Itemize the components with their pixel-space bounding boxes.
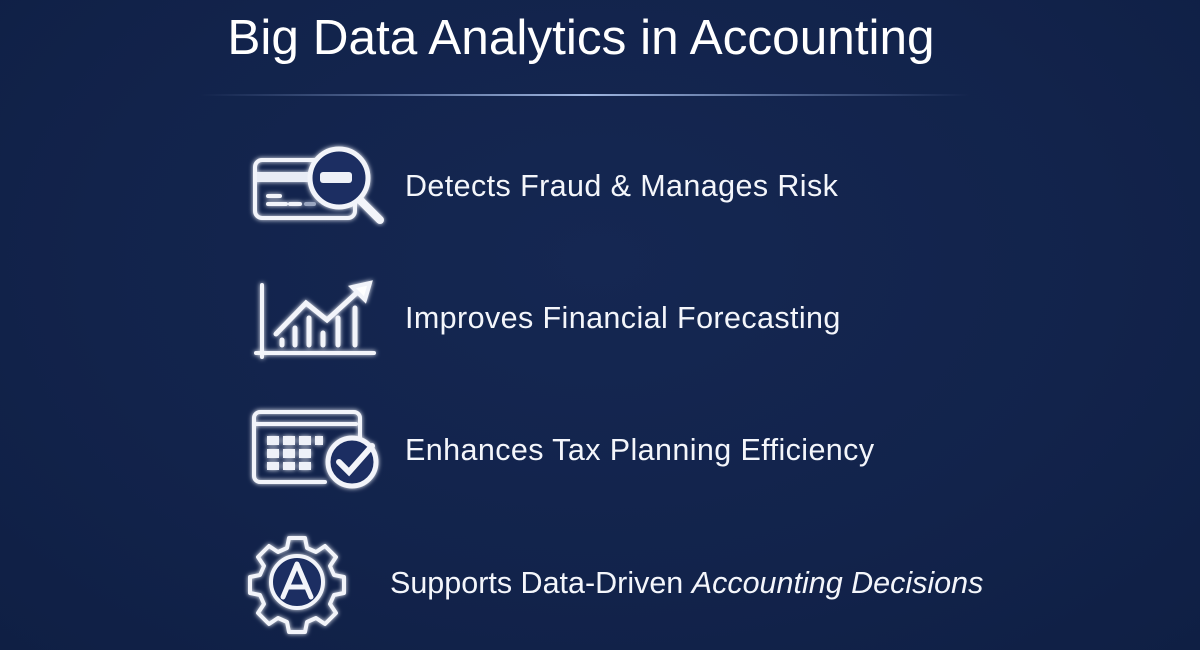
- text: decisions: Supports Data-Driven Accounting Decisions: [390, 566, 983, 600]
- text: fraud: Detects Fraud & Manages Risk: [405, 169, 838, 203]
- title: Big Data Analytics in Accounting: [227, 10, 935, 65]
- icon: growth chart: [256, 283, 374, 357]
- text: forecasting: Improves Financial Forecasting: [405, 301, 841, 335]
- icon: gear with A: [250, 538, 344, 632]
- icon: calendar with check: [254, 412, 376, 486]
- icon: credit card with magnifier: [255, 149, 380, 220]
- text: tax: Enhances Tax Planning Efficiency: [405, 433, 874, 467]
